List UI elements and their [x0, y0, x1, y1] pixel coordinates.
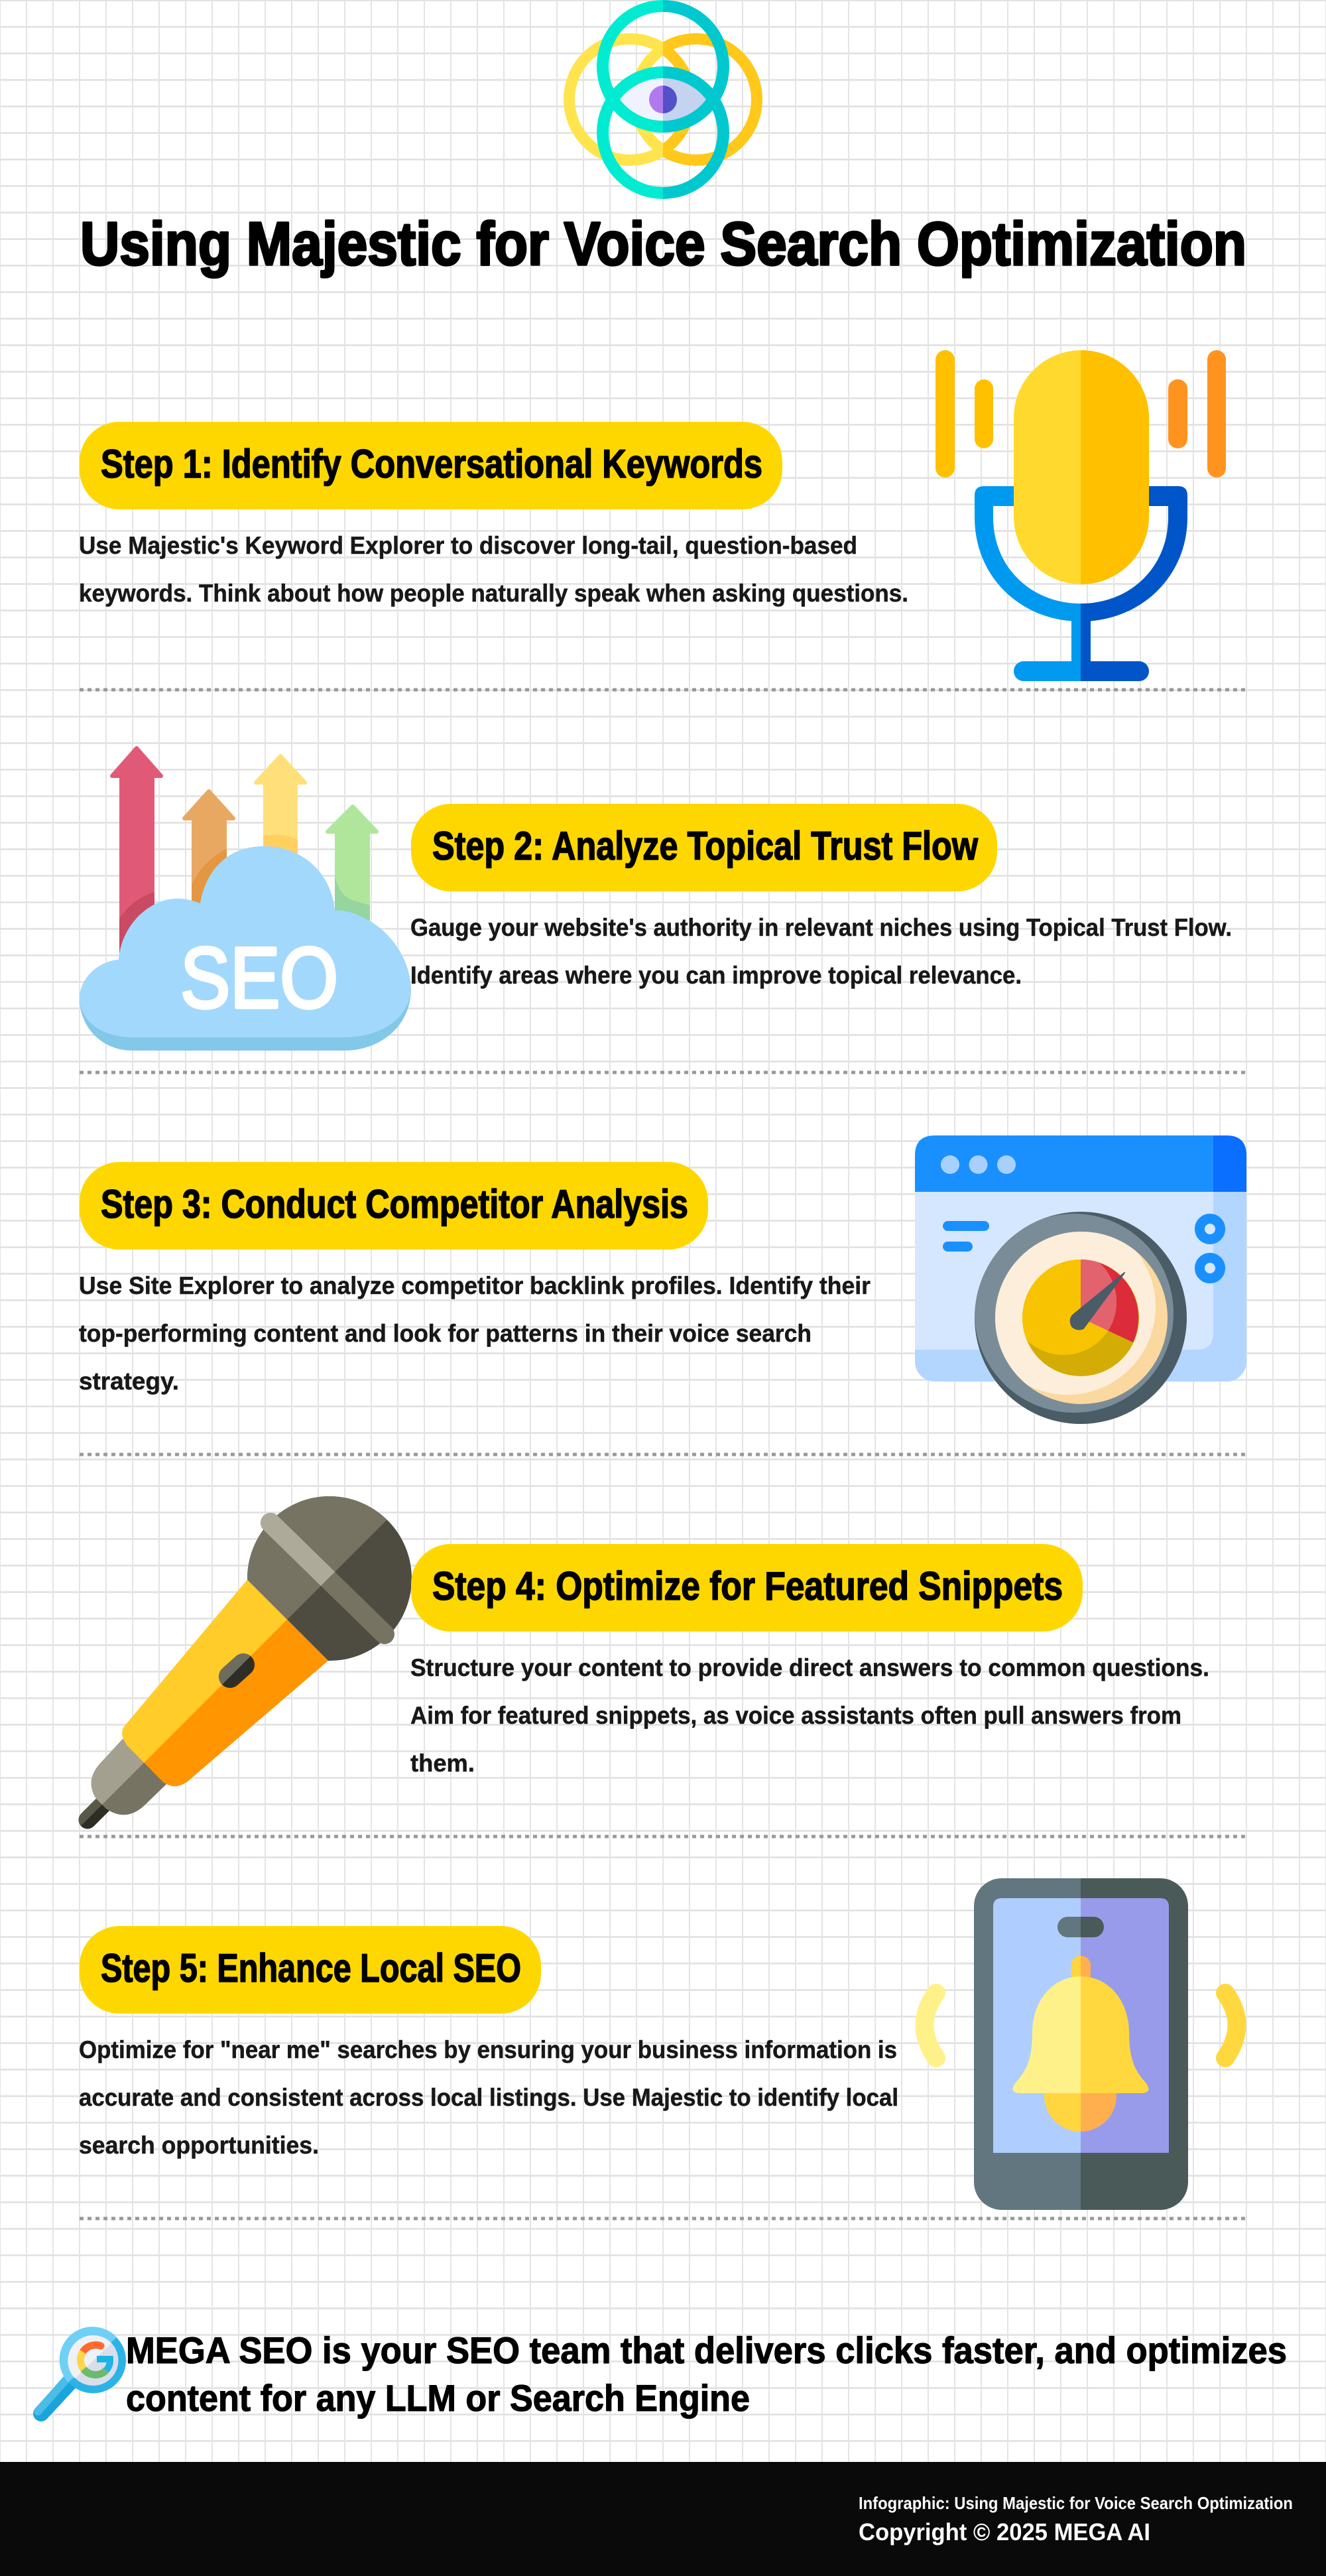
footer bar: [0, 2462, 1326, 2576]
step 2 body text: Identify areas where you can improve topical relevance.: [410, 962, 1022, 989]
step 3 body text: top-performing content and look for patterns in their voice search: [79, 1320, 812, 1347]
icon: logo with rings and eye: [569, 6, 757, 193]
step 1 body text: Use Majestic's Keyword Explorer to discover long-tail, question-based: [79, 532, 857, 559]
step 5 heading pill: Step 5: Enhance Local SEO: [101, 1946, 521, 1990]
step 3 body text: [79, 1272, 871, 1395]
step 4 body text: them.: [410, 1750, 475, 1777]
step 3 heading pill: [80, 1162, 708, 1250]
microphone handle: [122, 1580, 328, 1786]
panel: step 1: [79, 350, 1226, 681]
green arrow: [328, 806, 377, 923]
step 1 heading pill: [80, 422, 782, 509]
icon: SEO cloud with rising arrows: [80, 748, 411, 1051]
step 4 body text: [410, 1654, 1209, 1777]
call to action text: MEGA SEO is your SEO team that delivers clicks faster, and optimizes: [126, 2329, 1287, 2371]
step 1 heading pill: Step 1: Identify Conversational Keywords: [101, 442, 762, 486]
call to action text: content for any LLM or Search Engine: [126, 2377, 750, 2419]
icon: smartphone with notification bell: [924, 1878, 1237, 2210]
cloud: [80, 846, 411, 1051]
panel: step 2: [80, 748, 1232, 1051]
step 1 body text: [79, 532, 908, 607]
step 2 heading pill: Step 2: Analyze Topical Trust Flow: [432, 824, 978, 868]
step 2 body text: [410, 914, 1232, 989]
step 5 body text: accurate and consistent across local listings. Use Majestic to identify local: [79, 2084, 898, 2111]
icon: handheld microphone: [88, 1496, 412, 1820]
red arrow: [112, 748, 161, 956]
step 2 body text: Gauge your website's authority in relevant niches using Topical Trust Flow.: [410, 914, 1232, 941]
step 4 heading pill: [411, 1544, 1083, 1632]
step 1 body text: keywords. Think about how people naturally speak when asking questions.: [79, 580, 908, 607]
step 5 body text: Optimize for "near me" searches by ensuring your business information is: [79, 2036, 897, 2063]
microphone head: [247, 1496, 412, 1661]
footer caption: Infographic: Using Majestic for Voice Search Optimization: [859, 2493, 1293, 2513]
step 3 body text: Use Site Explorer to analyze competitor backlink profiles. Identify their: [79, 1272, 871, 1299]
step 3 body text: strategy.: [79, 1368, 179, 1395]
step 5 body text: [79, 2036, 898, 2159]
step 4 body text: Structure your content to provide direct answers to common questions.: [410, 1654, 1209, 1681]
step 3 heading pill: Step 3: Conduct Competitor Analysis: [101, 1182, 688, 1226]
step 4 body text: Aim for featured snippets, as voice assistants often pull answers from: [410, 1702, 1181, 1729]
step 4 heading pill: Step 4: Optimize for Featured Snippets: [432, 1564, 1063, 1608]
step 2 heading pill: [411, 804, 997, 891]
panel: step 3: [79, 1135, 1246, 1424]
copyright: Copyright © 2025 MEGA AI: [859, 2518, 1150, 2545]
orange arrow: [184, 791, 233, 903]
icon: magnifier with Google G: [38, 2327, 126, 2414]
panel: step 4: [88, 1496, 1209, 1820]
cloud: SEO: [180, 929, 338, 1026]
yellow arrow: [256, 756, 305, 864]
microphone tail: [88, 1739, 166, 1820]
call to action text: [126, 2329, 1287, 2419]
panel: step 5: [79, 1878, 1237, 2210]
step 5 body text: search opportunities.: [79, 2132, 319, 2159]
browser window: [915, 1135, 1246, 1382]
gauge dial: [975, 1212, 1187, 1424]
icon: browser window with gauge: [915, 1135, 1246, 1424]
icon: studio microphone with sound bars: [935, 350, 1226, 681]
step 5 heading pill: [80, 1926, 541, 2014]
